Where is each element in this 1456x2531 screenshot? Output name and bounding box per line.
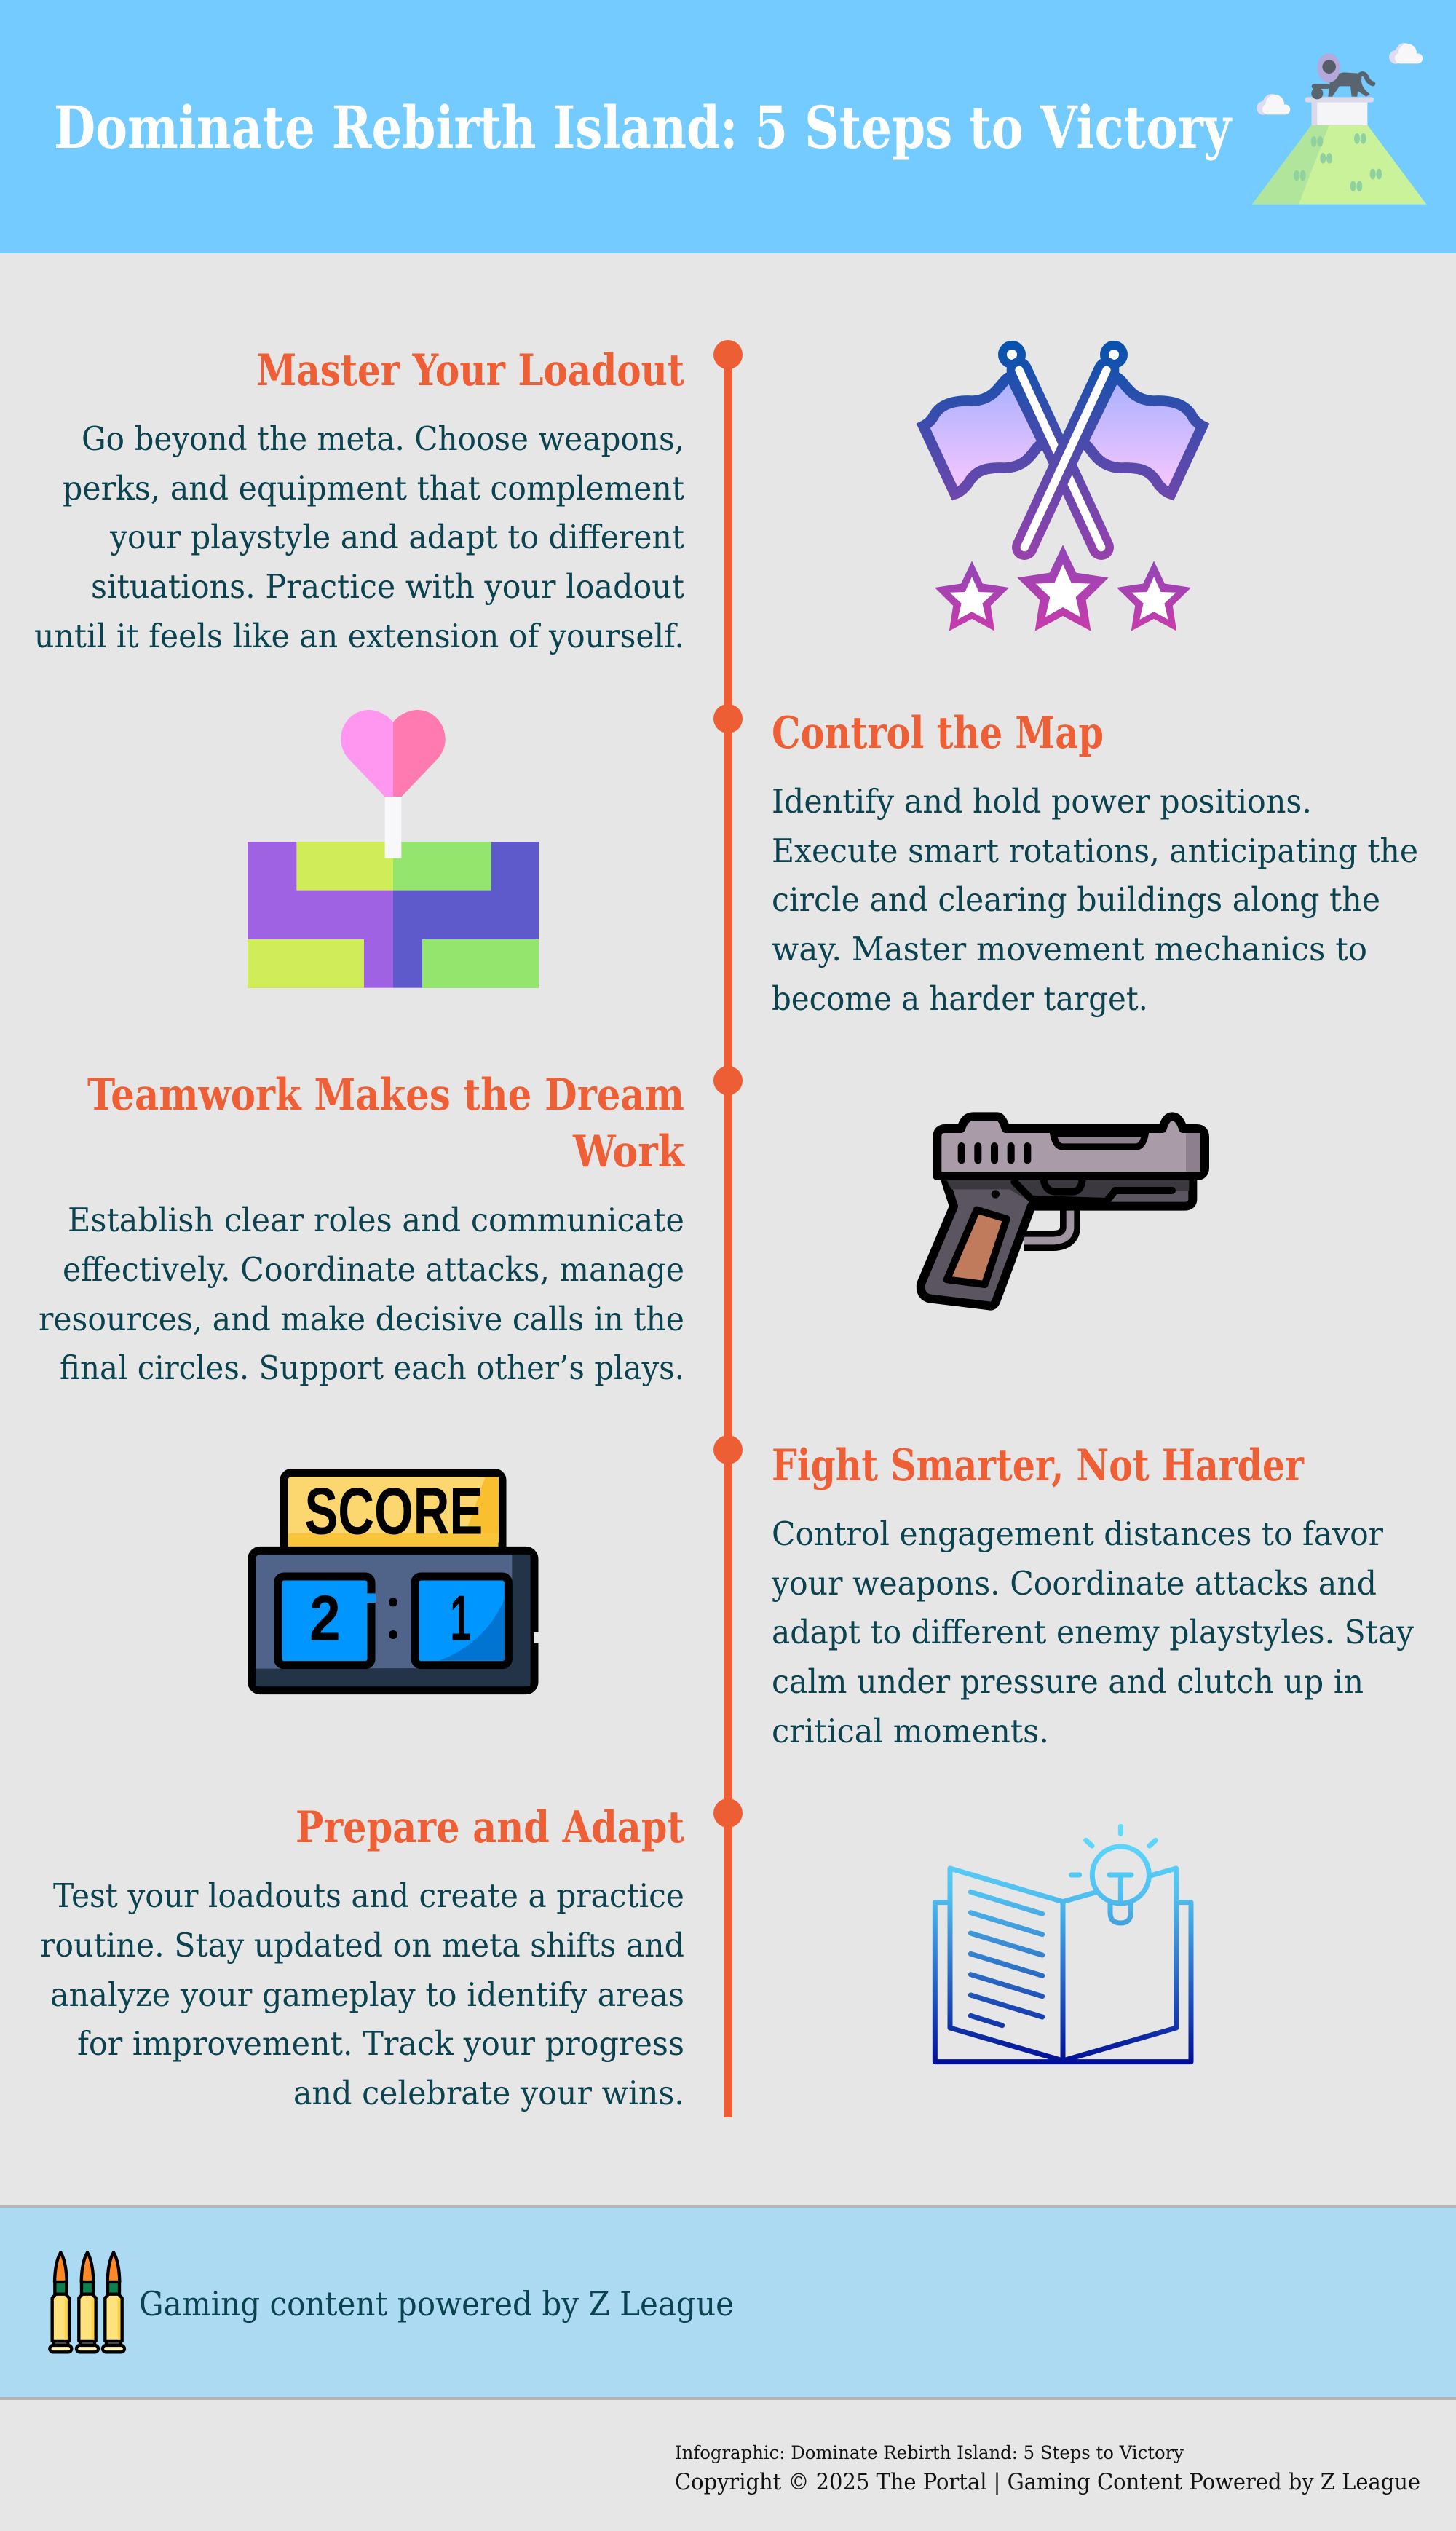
footer text: Gaming content powered by Z League [139,2284,734,2323]
step 3 text: Teamwork Makes the Dream Work: Work [572,1126,685,1177]
footer band [0,2205,1456,2400]
credits: Infographic: Dominate Rebirth Island: 5 Steps to Victory [675,2442,1184,2463]
step 5 text: Prepare and Adapt: Test your loadouts and create a practice [53,1876,684,1915]
step 5 text: Prepare and Adapt: routine. Stay updated on meta shifts and [40,1926,684,1965]
icon: score board [252,1473,539,1691]
icon: score board: 1 [450,1582,471,1654]
credits [675,2442,1420,2495]
step 5 text: Prepare and Adapt [40,1802,684,2112]
step 2 text: Control the Map: way. Master movement mechanics to [772,930,1367,968]
icon: score board: SCORE [304,1475,483,1549]
step 2 text: Control the Map [772,708,1418,1018]
title: Dominate Rebirth Island: 5 Steps to Victory [54,93,1233,162]
step 3 text: Teamwork Makes the Dream Work: resources, and make decisive calls in the [39,1300,684,1338]
step 1 text: Master Your Loadout: situations. Practice with your loadout [91,567,684,606]
header banner [0,0,1456,253]
step 1 text: Master Your Loadout: your playstyle and adapt to different [109,518,684,556]
step 2 text: Control the Map: circle and clearing buildings along the [772,880,1380,919]
icon: hill with lion statue [1252,43,1426,205]
step 3 text: Teamwork Makes the Dream Work: final circles. Support each other’s plays. [60,1349,684,1387]
step 1 text: Master Your Loadout [34,345,684,655]
icon: pistol [921,1116,1205,1306]
icon: open book with light bulb [935,1826,1191,2062]
step 4 text: Fight Smarter, Not Harder: Control engagement distances to favor [772,1515,1383,1553]
step 5 text: Prepare and Adapt: analyze your gameplay to identify areas [50,1975,684,2014]
icon: score board: 2 [309,1582,341,1654]
step 4 text: Fight Smarter, Not Harder: adapt to different enemy playstyles. Stay [772,1613,1415,1651]
step 4 text: Fight Smarter, Not Harder: critical moments. [772,1712,1049,1750]
step 2 text: Control the Map: Identify and hold power positions. [772,782,1312,821]
step 1 text: Master Your Loadout: perks, and equipment that complement [63,469,684,508]
step 4 text: Fight Smarter, Not Harder [771,1440,1415,1750]
step 2 text: Control the Map: Control the Map [772,708,1104,759]
icon: map block with heart marker [248,710,539,988]
step 1 text: Master Your Loadout: Master Your Loadout [256,345,684,396]
step 3 text: Teamwork Makes the Dream Work: effectively. Coordinate attacks, manage [63,1250,684,1289]
step 3 text: Teamwork Makes the Dream Work: Establish clear roles and communicate [68,1201,684,1239]
step 2 text: Control the Map: Execute smart rotations, anticipating the [772,832,1418,870]
step 5 text: Prepare and Adapt: Prepare and Adapt [296,1802,684,1853]
step 4 text: Fight Smarter, Not Harder: your weapons. Coordinate attacks and [771,1564,1377,1603]
step 2 text: Control the Map: become a harder target. [772,979,1148,1018]
step 4 text: Fight Smarter, Not Harder: Fight Smarter, Not Harder [772,1440,1305,1491]
step 3 text: Teamwork Makes the Dream Work: Teamwork Makes the Dream [87,1070,684,1121]
step 5 text: Prepare and Adapt: and celebrate your wins. [293,2074,684,2112]
credits: Copyright © 2025 The Portal | Gaming Content Powered by Z League [675,2469,1420,2495]
step 1 text: Master Your Loadout: Go beyond the meta. Choose weapons, [82,419,684,458]
icon: three bullets [50,2252,124,2352]
step 3 text: Teamwork Makes the Dream Work [39,1070,685,1387]
step 5 text: Prepare and Adapt: for improvement. Track your progress [77,2024,684,2063]
step 4 text: Fight Smarter, Not Harder: calm under pressure and clutch up in [772,1662,1364,1701]
icon: crossed flags and stars [923,345,1203,631]
step 1 text: Master Your Loadout: until it feels like an extension of yourself. [34,617,684,655]
timeline line and step dots [713,340,743,2117]
